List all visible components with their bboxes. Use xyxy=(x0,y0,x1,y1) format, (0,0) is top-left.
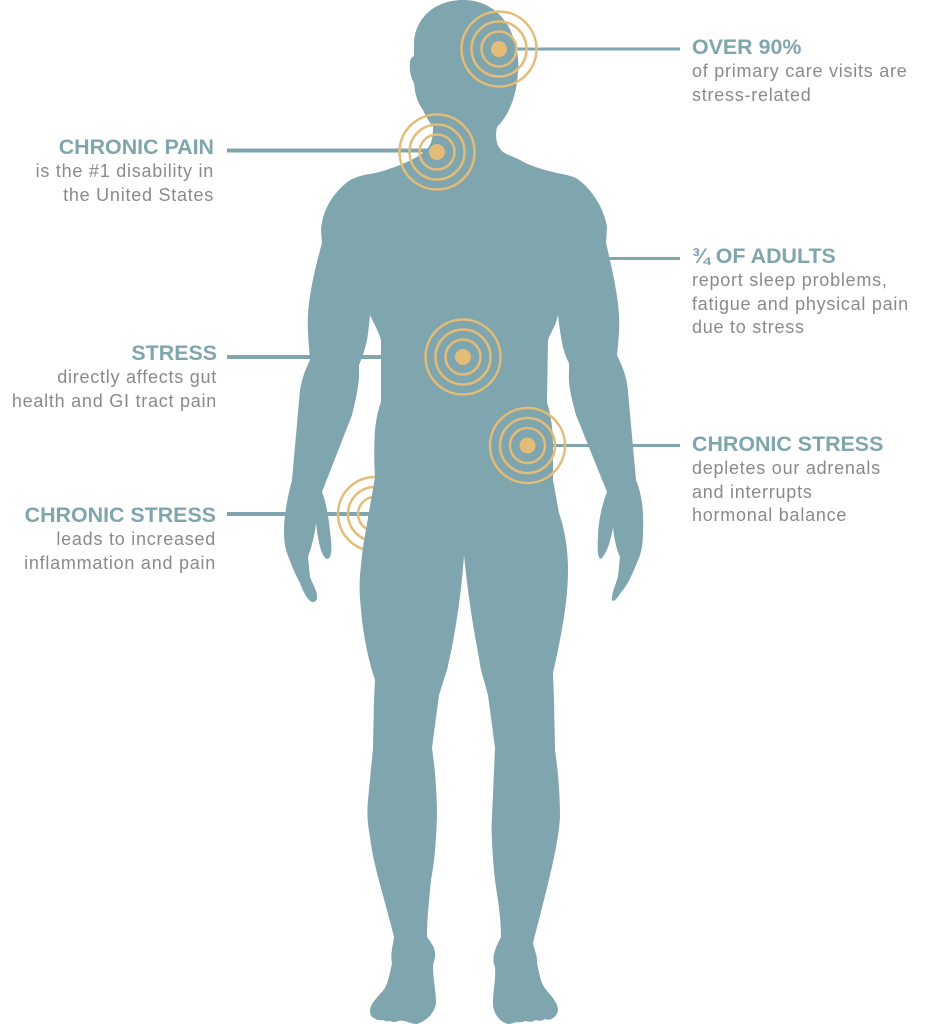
target ring: adrenal xyxy=(490,408,565,483)
connector lines xyxy=(227,49,680,514)
callout: stress: STRESS xyxy=(131,341,217,365)
target ring: stomach xyxy=(426,320,500,394)
callout: chronic stress inflammation: CHRONIC STRESS xyxy=(25,503,216,527)
callout: chronic stress inflammation xyxy=(24,503,216,573)
callout: chronic stress adrenals: depletes our adrenals xyxy=(692,458,881,478)
callout: three quarters of adults: fatigue and physical pain xyxy=(692,294,909,314)
callout: over 90%: stress-related xyxy=(692,84,812,104)
target ring: head xyxy=(462,12,536,86)
callout: over 90%: OVER 90% xyxy=(692,35,801,59)
target rings: hip, behind body xyxy=(338,477,412,551)
target ring: neck xyxy=(400,114,474,190)
callout: chronic stress adrenals: hormonal balance xyxy=(692,505,847,525)
callout: three quarters of adults: report sleep problems, xyxy=(692,270,888,290)
callout: chronic pain: CHRONIC PAIN xyxy=(59,135,214,159)
callout: chronic pain: is the #1 disability in xyxy=(36,161,214,181)
human silhouette xyxy=(284,0,643,1024)
callout: over 90% xyxy=(692,35,908,104)
callout: stress xyxy=(12,341,217,411)
callout: chronic stress adrenals: and interrupts xyxy=(692,482,813,502)
callout: stress: directly affects gut xyxy=(57,367,217,387)
callout: chronic stress inflammation: leads to increased xyxy=(56,529,216,549)
callout: three quarters of adults: due to stress xyxy=(692,317,805,337)
callout: three quarters of adults: ¾ OF ADULTS xyxy=(692,244,836,268)
callout: stress: health and GI tract pain xyxy=(12,390,217,410)
callout: chronic stress adrenals xyxy=(692,432,883,525)
callout: chronic pain: the United States xyxy=(63,184,214,204)
callout: three quarters of adults xyxy=(692,244,909,337)
callout: chronic pain xyxy=(36,135,214,204)
callout: over 90%: of primary care visits are xyxy=(692,61,908,81)
callout: chronic stress adrenals: CHRONIC STRESS xyxy=(692,432,883,456)
callout: chronic stress inflammation: inflammation and pain xyxy=(24,552,216,572)
